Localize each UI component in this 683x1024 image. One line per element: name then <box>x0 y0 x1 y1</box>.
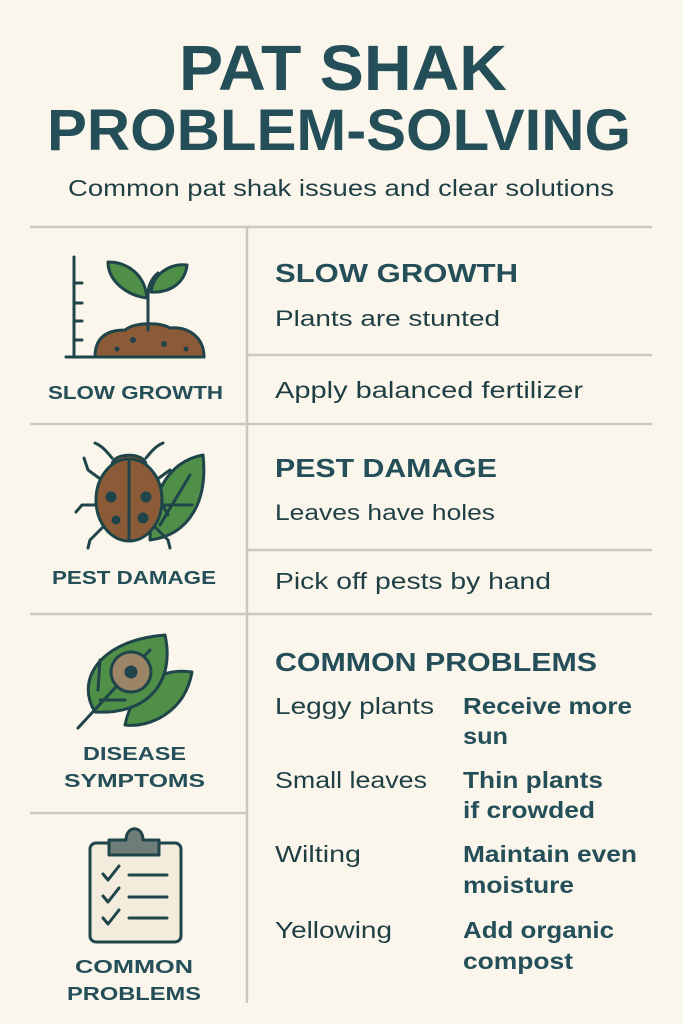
label: disease symptoms: SYMPTOMS <box>64 771 205 791</box>
heading: pest damage: PEST DAMAGE <box>275 453 497 483</box>
text: solution: Pick off pests by hand <box>275 568 551 594</box>
title: PROBLEM-SOLVING <box>47 98 631 163</box>
text: solution: Apply balanced fertilizer <box>275 377 583 403</box>
label: common problems <box>67 957 201 1004</box>
table: problems: Yellowing <box>275 917 392 943</box>
heading: common problems: COMMON PROBLEMS <box>275 647 597 677</box>
table: solutions: moisture <box>463 872 574 898</box>
table: problems <box>275 693 434 943</box>
label: pest damage: PEST DAMAGE <box>52 568 216 588</box>
table: solutions: sun <box>463 723 508 749</box>
table: solutions: Maintain even <box>463 841 637 867</box>
subtitle: Common pat shak issues and clear solutions <box>68 175 614 201</box>
table: solutions: Thin plants <box>463 767 603 793</box>
icon: seedling with ruler <box>66 257 204 357</box>
label: slow growth: SLOW GROWTH <box>48 383 223 403</box>
table: problems: Small leaves <box>275 767 427 793</box>
text: symptom: Leaves have holes <box>275 500 495 525</box>
icon: clipboard checklist <box>90 829 181 942</box>
label: common problems: PROBLEMS <box>67 984 201 1004</box>
text: symptom: Plants are stunted <box>275 306 500 331</box>
title: PAT SHAK <box>179 32 507 104</box>
table: solutions <box>463 693 637 974</box>
table: solutions: compost <box>463 948 573 974</box>
icon: diseased leaf <box>78 635 192 728</box>
table: solutions: Receive more <box>463 693 632 719</box>
title <box>47 32 631 163</box>
icon: beetle on leaf <box>76 443 204 548</box>
table: solutions: Add organic <box>463 917 614 943</box>
label: disease symptoms: DISEASE <box>83 744 186 764</box>
heading: slow growth: SLOW GROWTH <box>275 258 518 288</box>
label: common problems: COMMON <box>75 957 193 977</box>
table: solutions: if crowded <box>463 797 595 823</box>
label: disease symptoms <box>64 744 205 791</box>
table: problems: Leggy plants <box>275 693 434 719</box>
table: problems: Wilting <box>275 841 361 867</box>
